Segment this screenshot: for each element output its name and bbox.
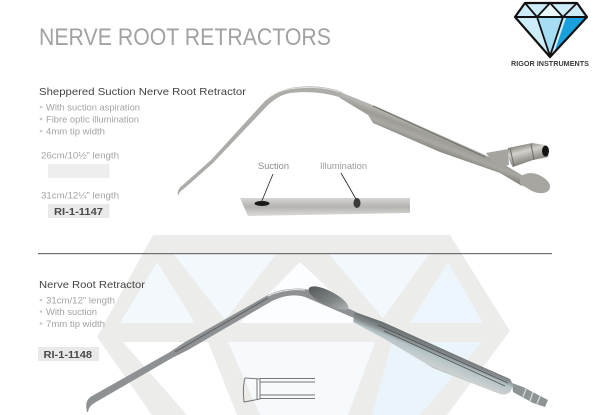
watermark: diamond logo <box>97 235 510 415</box>
instrument: suction retractor <box>178 86 550 196</box>
length option 26cm <box>41 150 119 178</box>
feature list 1: With suction aspiration <box>46 102 140 112</box>
feature list 1 <box>40 102 140 136</box>
length option 26cm: 26cm/10½" length <box>41 150 119 160</box>
inset: tip detail <box>240 161 410 216</box>
inset: nerve root retractor tip outline <box>243 378 315 402</box>
feature list 2 <box>40 296 115 329</box>
feature list 2: 7mm tip width <box>46 319 105 329</box>
feature list 2: 31cm/12" length <box>46 296 115 306</box>
thumb paddle <box>309 286 348 310</box>
divider rule <box>38 253 552 254</box>
handle <box>353 312 512 395</box>
feature list 1: 4mm tip width <box>46 126 105 136</box>
product code RI-1-1148: RI-1-1148 <box>44 349 92 361</box>
label: Illumination: Illumination <box>320 161 367 171</box>
product 2 text block <box>39 279 146 329</box>
label: Suction: Suction <box>258 161 289 171</box>
product 1 text block: Sheppered Suction Nerve Root Retractor <box>39 86 247 98</box>
length option 31cm with code: 31cm/12¼" length <box>41 190 119 200</box>
logo: Rigor Instruments: RIGOR INSTRUMENTS <box>511 61 589 68</box>
product 1 text block <box>39 86 247 136</box>
feature list 1: Fibre optic illumination <box>46 114 139 124</box>
hose barb tip <box>512 383 548 407</box>
bulb end <box>520 173 550 193</box>
length option 31cm with code: RI-1-1147 <box>54 206 103 218</box>
tip strip <box>240 198 410 216</box>
product 2 text block: Nerve Root Retractor <box>39 279 146 291</box>
product code RI-1-1148 <box>38 347 99 361</box>
title: NERVE ROOT RETRACTORS <box>39 24 331 51</box>
feature list 2: With suction <box>46 307 97 317</box>
logo: Rigor Instruments <box>511 3 589 68</box>
handle <box>340 92 525 186</box>
suction port <box>486 149 509 168</box>
length option 31cm with code <box>41 190 119 218</box>
instrument: nerve root retractor <box>86 286 548 412</box>
